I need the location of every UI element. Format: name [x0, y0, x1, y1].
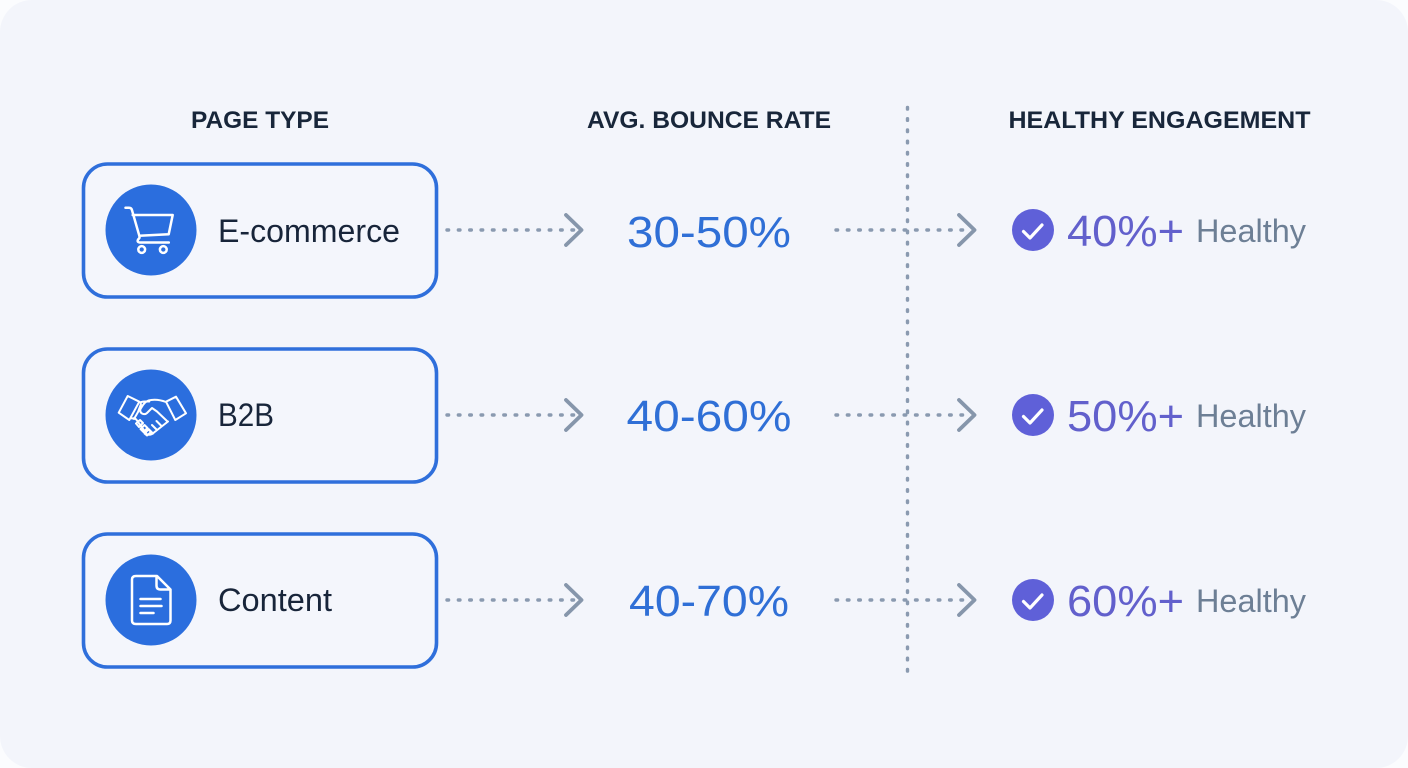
label: content: Content	[218, 582, 332, 618]
label: healthy: Healthy	[1196, 398, 1306, 434]
arrow: bounce rate to engagement	[836, 400, 974, 430]
row: b2b	[84, 349, 1306, 482]
heading: average bounce rate: AVG. BOUNCE RATE	[587, 107, 831, 134]
arrow: card to bounce rate	[447, 215, 582, 245]
value: healthy engagement 40%+: 40%+	[1067, 207, 1184, 256]
value: bounce rate 40-60%: 40-60%	[626, 392, 792, 441]
icon: handshake	[106, 370, 196, 460]
icon: shopping cart	[106, 184, 196, 276]
value: healthy engagement 60%+: 60%+	[1067, 577, 1184, 626]
label: e-commerce: E-commerce	[218, 213, 400, 249]
icon: check badge	[1012, 209, 1054, 251]
icon: check badge	[1012, 579, 1054, 621]
panel: e-commerce card	[84, 164, 436, 297]
label: healthy: Healthy	[1196, 583, 1306, 619]
row: e-commerce	[84, 164, 1306, 297]
arrow: card to bounce rate	[447, 585, 582, 615]
heading: healthy engagement: HEALTHY ENGAGEMENT	[1008, 107, 1311, 134]
value: bounce rate 30-50%: 30-50%	[627, 208, 791, 257]
label: b2b: B2B	[218, 397, 274, 433]
value: bounce rate 40-70%: 40-70%	[629, 577, 789, 626]
arrow: bounce rate to engagement	[836, 215, 974, 245]
arrow: bounce rate to engagement	[836, 585, 974, 615]
label: healthy: Healthy	[1196, 213, 1306, 249]
vertical dotted divider	[906, 108, 909, 672]
icon: document	[106, 554, 196, 646]
heading: page type: PAGE TYPE	[191, 107, 329, 134]
panel: content card	[84, 534, 436, 667]
value: healthy engagement 50%+: 50%+	[1067, 392, 1184, 441]
arrow: card to bounce rate	[447, 400, 582, 430]
row: content	[84, 534, 1306, 667]
panel: b2b card	[84, 349, 436, 482]
icon: check badge	[1012, 394, 1054, 436]
